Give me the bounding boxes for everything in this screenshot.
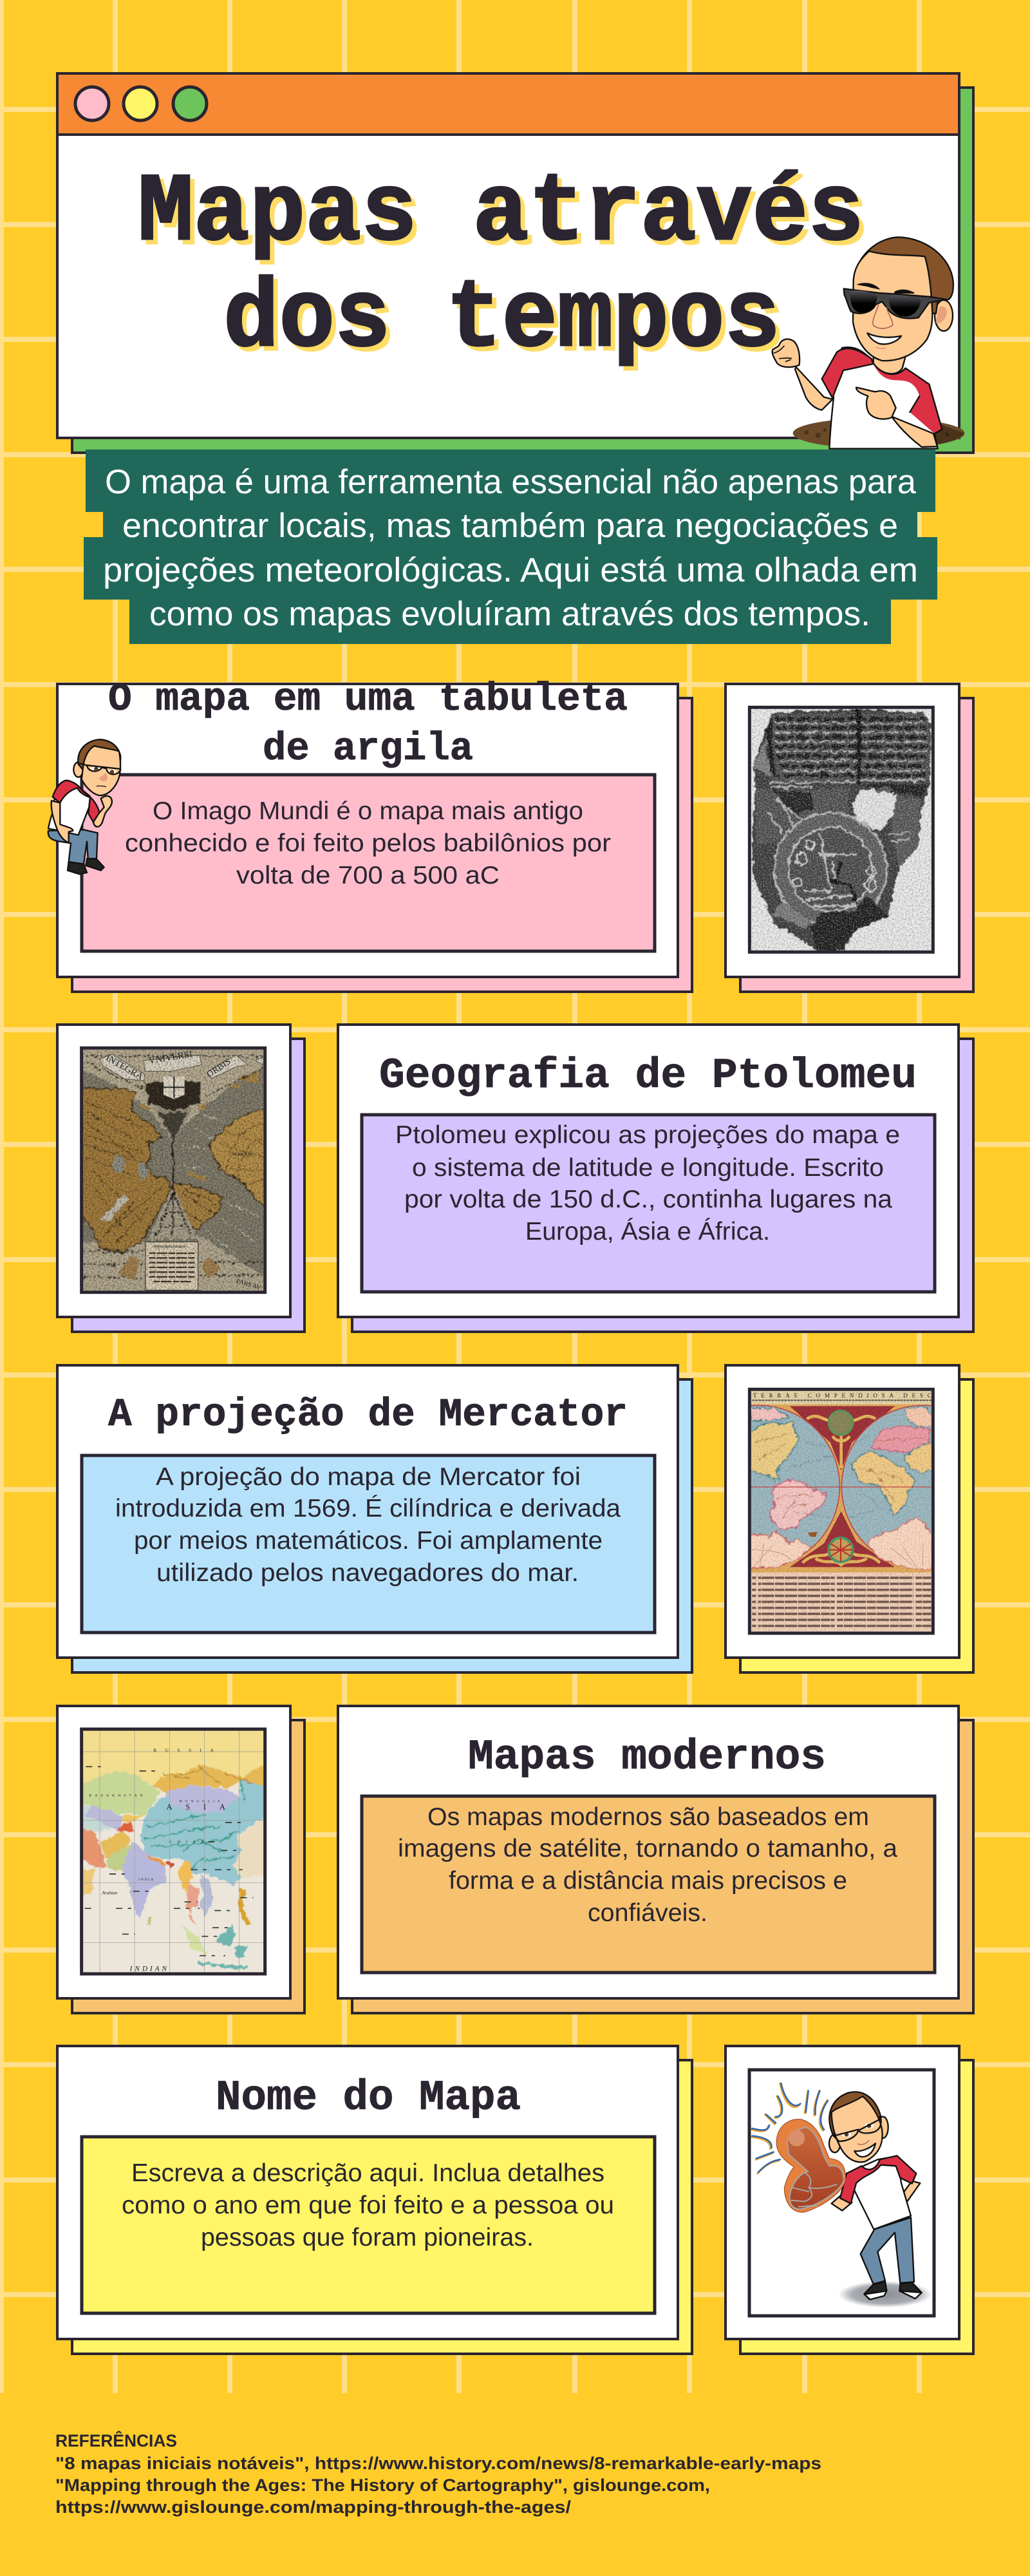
image: modern map of Asia: KAZAKHSTAN	[89, 1794, 143, 1797]
description: map name: Escreva a descrição aqui. Inclua detalhes	[131, 2159, 604, 2187]
panel: title window	[57, 73, 973, 453]
description: modern maps: Os mapas modernos são baseados em	[427, 1803, 869, 1831]
heading: clay tablet: de argila	[263, 727, 473, 772]
description: map name: pessoas que foram pioneiras.	[201, 2224, 534, 2251]
image: Orontius Finé world map: PARS AV	[236, 1278, 262, 1292]
description: Ptolemy: Europa, Ásia e África.	[525, 1218, 770, 1245]
title: Mapas através	[138, 159, 864, 269]
heading: modern maps: Mapas modernos	[468, 1733, 826, 1781]
description: map name: como o ano em que foi feito e a pessoa ou	[122, 2192, 614, 2219]
panel: clay tablet map text	[57, 677, 692, 992]
panel: Mercator text	[57, 1365, 692, 1672]
description: Ptolemy: Ptolomeu explicou as projeções do mapa e	[395, 1121, 900, 1149]
description: clay tablet	[125, 797, 611, 889]
window dot: yellow	[124, 87, 157, 120]
title: dos tempos	[223, 265, 780, 375]
description: Mercator: por meios matemáticos. Foi amplamente	[134, 1527, 603, 1555]
panel: Ptolemy text	[338, 1025, 973, 1332]
description: Ptolemy: por volta de 150 d.C., continha lugares na	[404, 1186, 892, 1213]
text block: references: "Mapping through the Ages: The History of Cartography", gislounge.com,	[55, 2476, 710, 2495]
icon: character with foam finger	[751, 2083, 932, 2307]
heading: Mercator: A projeção de Mercator	[108, 1393, 628, 1437]
image: Orontius Finé world map: ORBIS	[205, 1057, 232, 1080]
image: Orontius Finé world map: FERNANDVS FINAEVS	[153, 1245, 186, 1249]
description: Mercator: introduzida em 1569. É cilíndrica e derivada	[115, 1495, 621, 1522]
image: modern map of Asia: INDIAN	[129, 1965, 167, 1973]
panel: Ptolemy image	[57, 1025, 304, 1332]
image: Orontius Finé world map: VNIVERSI	[148, 1049, 193, 1066]
icon: character with sunglasses in a hole	[772, 237, 964, 449]
image: double hemisphere world map: TERRAE COMPENDIOSA DESC	[753, 1392, 932, 1399]
description: clay tablet: O Imago Mundi é o mapa mais antigo	[153, 797, 583, 825]
text block: references: REFERÊNCIAS	[55, 2430, 177, 2450]
text block: intro paragraph: O mapa é uma ferramenta essencial não apenas para	[105, 463, 917, 501]
window dot: pink	[75, 87, 109, 120]
description: modern maps: forma e a distância mais precisos e	[449, 1867, 847, 1895]
image: Orontius Finé world map	[79, 1045, 266, 1294]
text block: intro paragraph	[84, 450, 937, 644]
description: Mercator: utilizado pelos navegadores do mar.	[156, 1559, 579, 1587]
text block: intro paragraph: como os mapas evoluíram através dos tempos.	[149, 595, 870, 633]
text block: intro paragraph: projeções meteorológicas. Aqui está uma olhada em	[103, 551, 918, 589]
panel: modern maps text	[338, 1706, 973, 2013]
description: Ptolemy: o sistema de latitude e longitude. Escrito	[412, 1154, 884, 1182]
title: dos tempos	[228, 270, 785, 379]
description: map name	[122, 2159, 614, 2251]
description: clay tablet: volta de 700 a 500 aC	[236, 862, 500, 889]
text block: intro paragraph: encontrar locais, mas também para negociações e	[122, 507, 898, 545]
panel: clay tablet image	[726, 684, 973, 992]
title: Mapas através	[142, 164, 868, 273]
image: Orontius Finé world map: TERRA AV	[232, 1152, 253, 1157]
description: Ptolemy	[395, 1121, 900, 1245]
image: modern map of Asia	[79, 1728, 266, 1974]
image: modern map of Asia: CHINA	[169, 1840, 205, 1844]
image: modern map of Asia: Arabian	[101, 1890, 118, 1896]
text block: references	[55, 2430, 821, 2517]
window dot: green	[173, 87, 207, 120]
panel: character image	[726, 2046, 973, 2354]
image: modern map of Asia: RUSSIA	[153, 1748, 214, 1754]
heading: Ptolemy: Geografia de Ptolomeu	[379, 1052, 917, 1100]
icon: thinking character	[48, 739, 120, 874]
panel: map name text	[57, 2046, 692, 2354]
panel: Mercator image	[724, 1364, 975, 1674]
heading: clay tablet: O mapa em uma tabuleta	[108, 677, 628, 722]
text block: references: "8 mapas iniciais notáveis", https://www.history.com/news/8-remarkable-early-maps	[55, 2454, 821, 2473]
description: modern maps: imagens de satélite, tornando o tamanho, a	[398, 1835, 897, 1862]
description: clay tablet: conhecido e foi feito pelos babilônios por	[125, 829, 611, 857]
text block: references: https://www.gislounge.com/mapping-through-the-ages/	[55, 2497, 572, 2517]
image: modern map of Asia: MONGOLIA	[179, 1801, 220, 1804]
heading: map name: Nome do Mapa	[216, 2074, 521, 2122]
title	[138, 159, 868, 379]
description: modern maps	[398, 1803, 897, 1927]
image: modern map of Asia: INDIA	[138, 1878, 154, 1882]
image: Orontius Finé world map: INTEGRA	[104, 1053, 145, 1083]
description: Mercator: A projeção do mapa de Mercator foi	[156, 1463, 581, 1491]
panel: modern maps image	[57, 1706, 304, 2013]
description: Mercator	[115, 1463, 621, 1587]
heading: clay tablet	[108, 677, 628, 772]
description: modern maps: confiáveis.	[588, 1899, 707, 1927]
image: Imago Mundi tablet	[749, 707, 933, 952]
image: modern map of Asia: ASIA	[166, 1803, 226, 1812]
image: double hemisphere world map	[748, 1387, 935, 1634]
